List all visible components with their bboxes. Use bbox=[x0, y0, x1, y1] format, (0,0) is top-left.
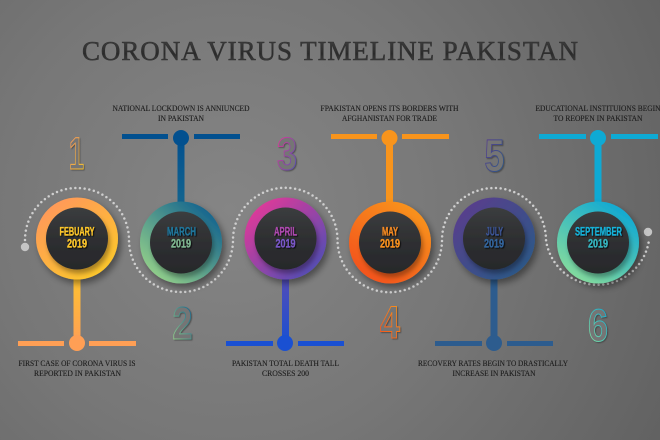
connector 3: death toll, bottom bbox=[226, 270, 344, 351]
node: February 2019 bbox=[36, 198, 118, 280]
node: September 2019: SEPTEMBER bbox=[575, 226, 622, 238]
node: February 2019: 2019 bbox=[67, 238, 87, 250]
text: lockdown: NATIONAL LOCKDOWN IS ANNIUNCED bbox=[112, 104, 250, 113]
node: April 2019: APRIL bbox=[274, 226, 297, 238]
connector 4: borders, top bbox=[331, 130, 449, 210]
node: May 2019 bbox=[349, 202, 431, 284]
text: first case: FIRST CASE OF CORONA VIRUS IS bbox=[18, 359, 136, 368]
text: first case: REPORTED IN PAKISTAN bbox=[34, 369, 121, 378]
number 4: 4 bbox=[380, 297, 400, 348]
number 1: 1 bbox=[69, 128, 84, 179]
connector 5: recovery, bottom bbox=[435, 270, 553, 351]
node: March 2019 bbox=[140, 202, 222, 284]
text: recovery: INCREASE IN PAKISTAN bbox=[452, 369, 536, 378]
dotted serpentine path bbox=[21, 188, 652, 292]
node: May 2019: 2019 bbox=[380, 238, 400, 250]
text: recovery bbox=[418, 359, 568, 378]
text: death toll bbox=[232, 359, 339, 378]
text: recovery: RECOVERY RATES BEGIN TO DRASTICALLY bbox=[418, 359, 568, 368]
text: death toll: CROSSES 200 bbox=[262, 369, 309, 378]
connector 6: education, top bbox=[539, 130, 658, 210]
node: April 2019 bbox=[244, 198, 326, 280]
text: education bbox=[536, 104, 660, 123]
text: education: TO REOPEN IN PAKISTAN bbox=[554, 114, 642, 123]
number 5: 5 bbox=[484, 130, 504, 181]
text: lockdown: IN PAKISTAN bbox=[158, 114, 204, 123]
node: September 2019 bbox=[557, 202, 639, 284]
number 2: 2 bbox=[172, 298, 192, 349]
connector 1: first case, bottom bbox=[18, 270, 136, 351]
node: May 2019: MAY bbox=[382, 226, 398, 238]
node: September 2019: 2019 bbox=[588, 238, 608, 250]
node: July 2019 bbox=[453, 198, 535, 280]
text: death toll: PAKISTAN TOTAL DEATH TALL bbox=[232, 359, 339, 368]
node: February 2019: FEBUARY bbox=[60, 226, 95, 238]
node: July 2019: JULY bbox=[486, 226, 503, 238]
number 3: 3 bbox=[277, 128, 297, 180]
node: April 2019: 2019 bbox=[276, 238, 296, 250]
title: CORONA VIRUS TIMELINE PAKISTAN bbox=[82, 36, 578, 66]
connector 2: lockdown, top bbox=[122, 130, 240, 210]
node: March 2019: 2019 bbox=[171, 238, 191, 250]
node: July 2019: 2019 bbox=[484, 238, 504, 250]
number 6: 6 bbox=[588, 300, 608, 351]
text: lockdown bbox=[112, 104, 250, 123]
node: March 2019: MARCH bbox=[167, 226, 196, 238]
text: first case bbox=[18, 359, 136, 378]
text: borders: FPAKISTAN OPENS ITS BORDERS WITH bbox=[320, 104, 459, 113]
text: borders: AFGHANISTAN FOR TRADE bbox=[342, 114, 437, 123]
text: borders bbox=[320, 104, 459, 123]
